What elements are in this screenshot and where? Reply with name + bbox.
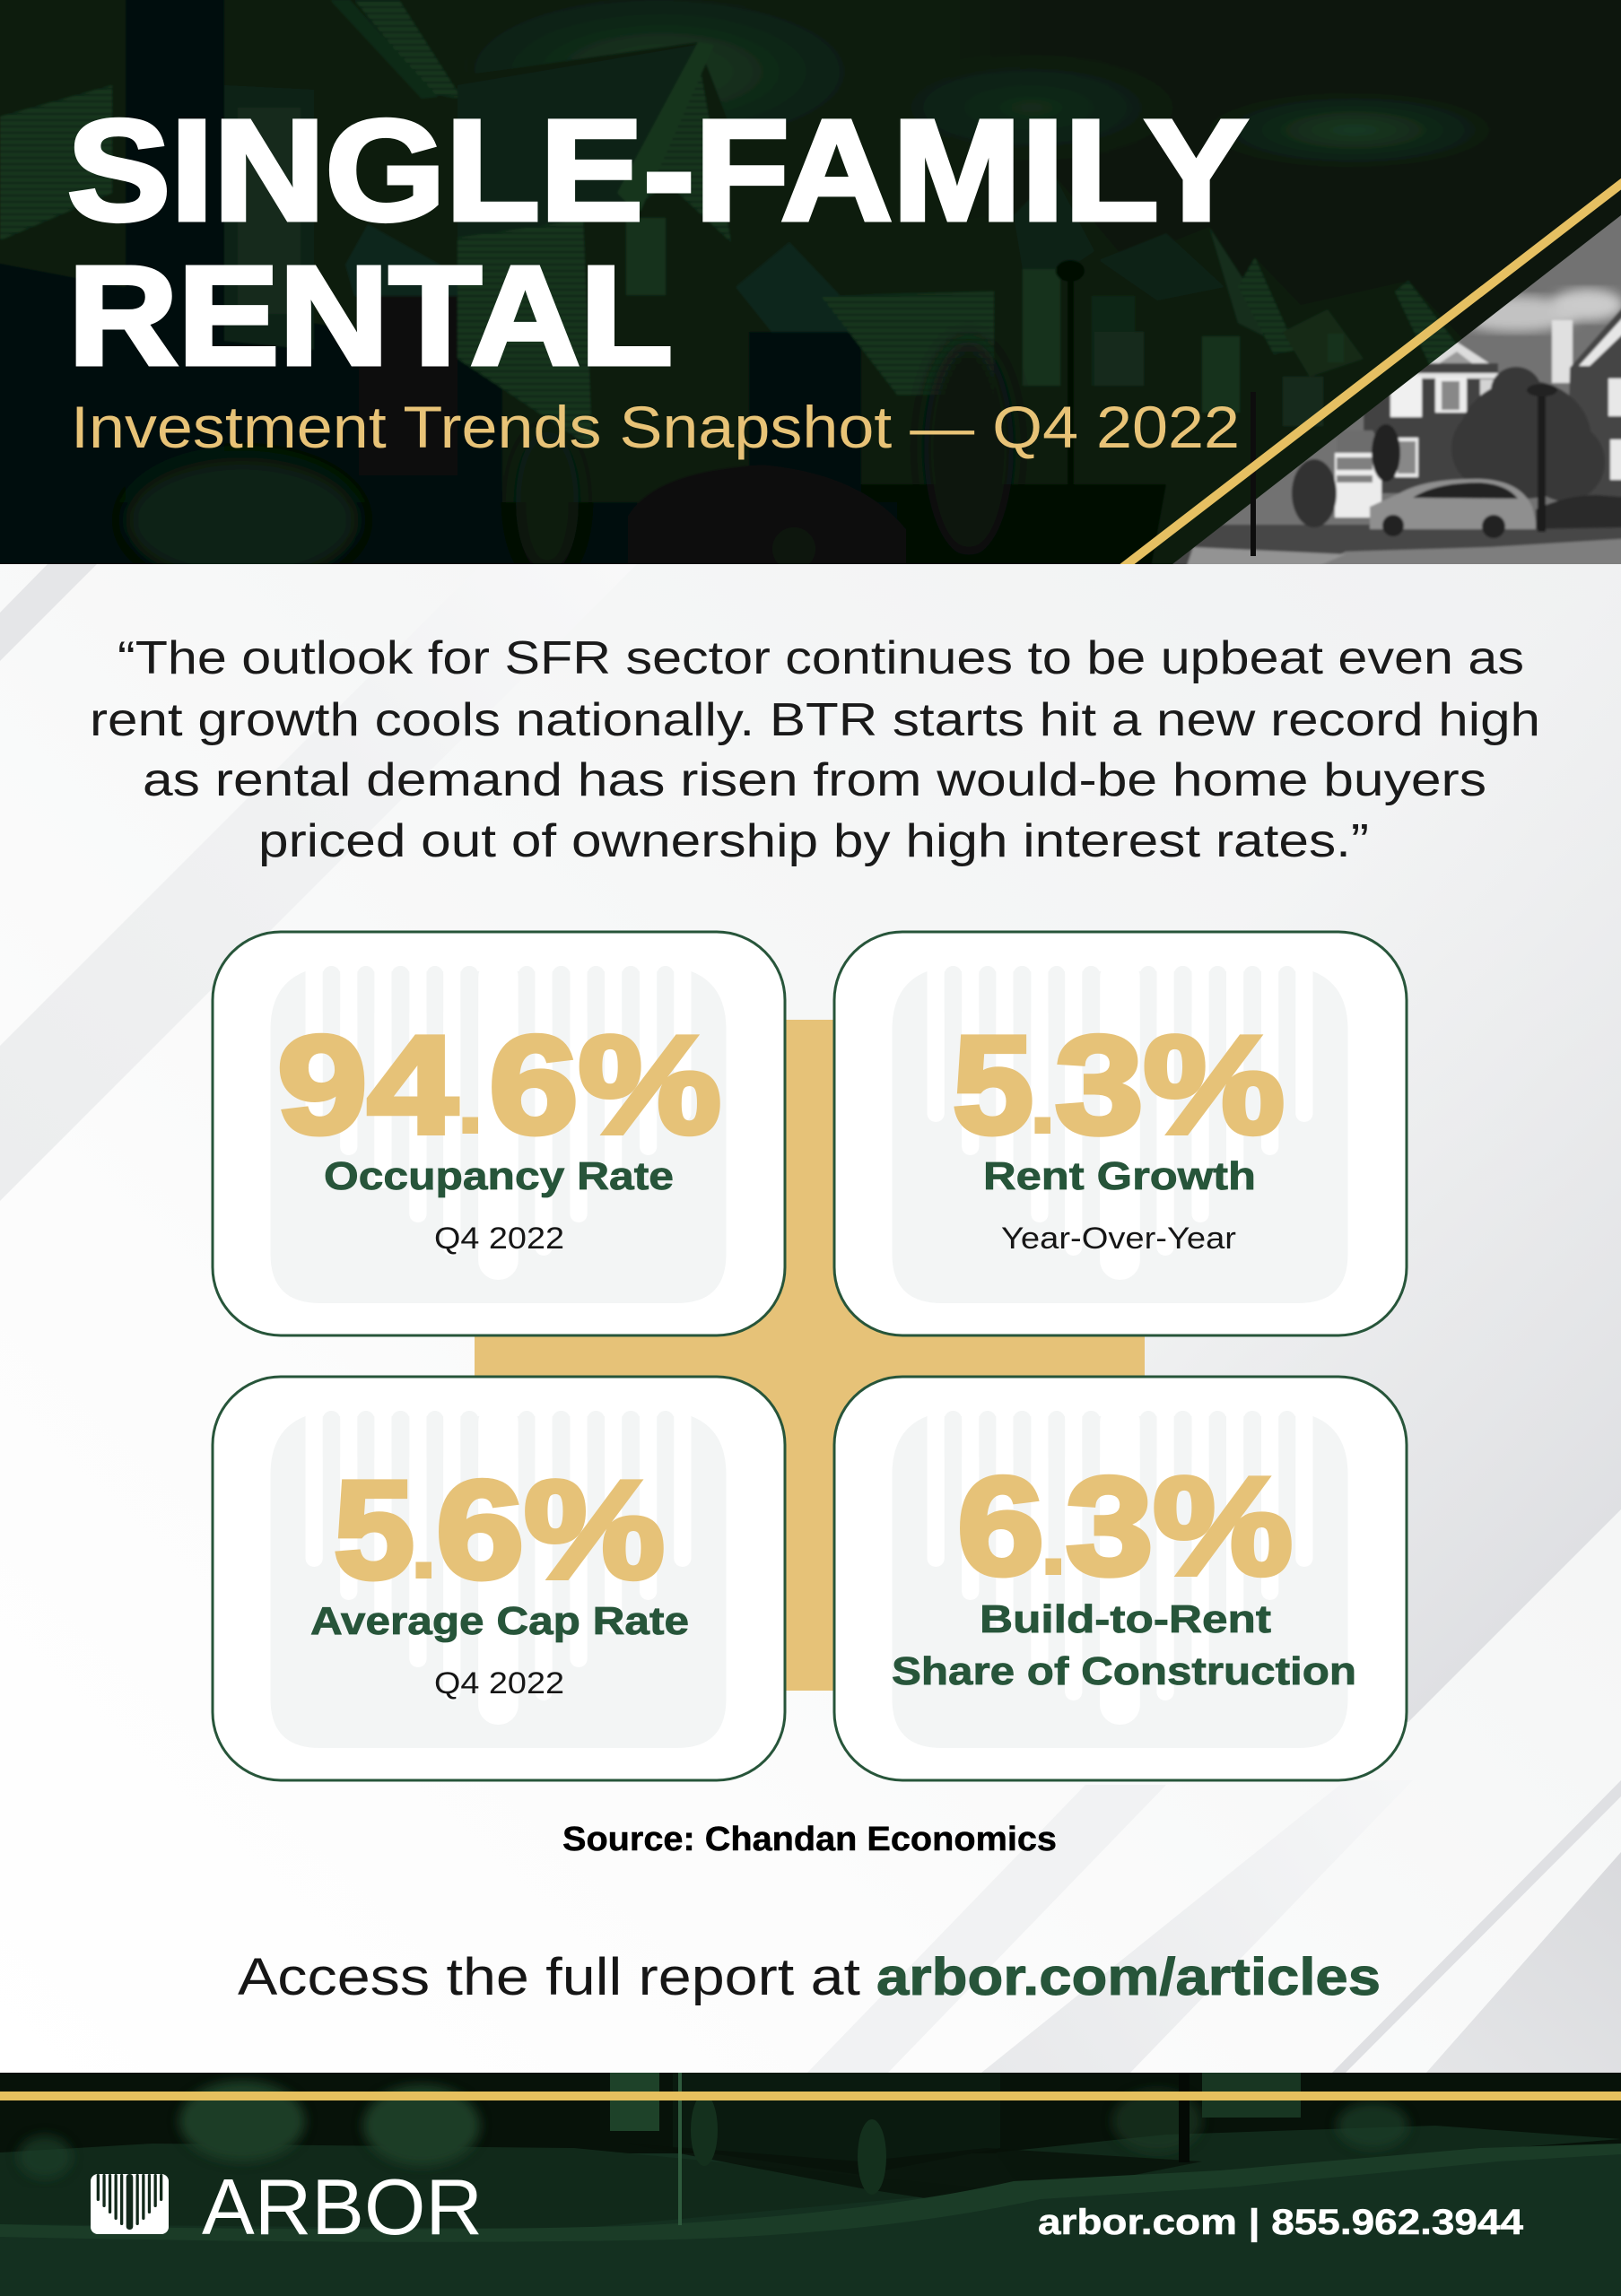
panel: rent growth: Rent Growth	[983, 1154, 1256, 1198]
quote: priced out of ownership by high interest rates.”	[258, 815, 1369, 867]
house three	[821, 175, 1274, 395]
panel: build-to-rent share: Share of Construction	[892, 1649, 1356, 1693]
house two	[456, 42, 863, 491]
title: RENTAL	[68, 238, 673, 395]
subtitle: Investment Trends Snapshot — Q4 2022	[71, 394, 1240, 460]
shrubs and car	[126, 341, 1014, 583]
house one	[0, 0, 502, 475]
panel: occupancy rate: 6%	[489, 1007, 721, 1162]
page background with diagonal bands	[0, 564, 1621, 2080]
contact details: arbor.com | 855.962.3944	[1038, 2203, 1524, 2242]
panel: occupancy rate: Q4 2022	[434, 1222, 564, 1256]
panel: average cap rate: Average Cap Rate	[310, 1599, 689, 1643]
call to action: arbor.com/articles	[876, 1948, 1381, 2006]
panel: build-to-rent share: .	[1040, 1485, 1068, 1596]
panel: average cap rate: Q4 2022	[434, 1666, 564, 1700]
quote: “The outlook for SFR sector continues to be upbeat even as	[118, 632, 1524, 684]
panel: occupancy rate: 94	[277, 1007, 458, 1162]
panel: build-to-rent share: Build-to-Rent	[980, 1597, 1271, 1641]
panel: occupancy rate: Occupancy Rate	[324, 1154, 674, 1198]
call to action	[238, 1948, 1381, 2006]
panel: average cap rate: 6%	[436, 1452, 665, 1607]
panel: average cap rate	[213, 1377, 785, 1780]
gold backing square	[475, 1020, 1145, 1691]
quote	[90, 632, 1540, 867]
lamp posts	[1055, 259, 1085, 485]
panel: build-to-rent share: 6	[957, 1448, 1044, 1604]
footer banner: darkened street photo	[0, 2073, 1621, 2296]
call to action: Access the full report at	[238, 1948, 860, 2006]
panel: rent growth: 3%	[1055, 1007, 1285, 1162]
panel: build-to-rent share: 3%	[1066, 1448, 1293, 1604]
footer gold line	[0, 2092, 1621, 2100]
panel: occupancy rate: .	[457, 1044, 484, 1154]
panel: build-to-rent share	[834, 1377, 1407, 1780]
arbor wordmark: ARBOR	[202, 2162, 483, 2251]
panel: rent growth: Year-Over-Year	[1001, 1222, 1236, 1256]
quote: as rental demand has risen from would-be home buyers	[143, 754, 1486, 806]
gold diagonal stripe	[1121, 178, 1621, 569]
panel: average cap rate: 5	[334, 1452, 414, 1607]
title	[67, 90, 1248, 395]
header banner: darkened street of houses	[0, 0, 1621, 583]
source line: Source: Chandan Economics	[562, 1821, 1057, 1858]
icon: arbor logo	[91, 2174, 169, 2234]
panel: rent growth: .	[1029, 1044, 1057, 1154]
street photo in greyscale	[1157, 206, 1621, 574]
quote: rent growth cools nationally. BTR starts hit a new record high	[90, 694, 1540, 746]
panel: occupancy rate	[213, 932, 785, 1335]
panel: rent growth	[834, 932, 1407, 1335]
panel: rent growth: 5	[953, 1007, 1033, 1162]
house four	[1202, 257, 1471, 426]
roofline silhouette of the street	[0, 0, 1498, 583]
post crossing the divider	[1251, 392, 1256, 556]
title: SINGLE-FAMILY	[67, 90, 1248, 250]
panel: average cap rate: .	[410, 1489, 438, 1599]
